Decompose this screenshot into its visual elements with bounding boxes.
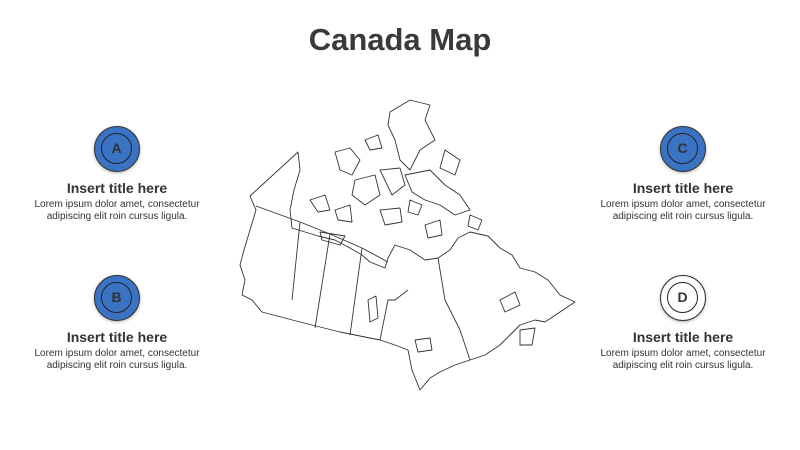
item D: Lorem ipsum dolor amet, consectetur (600, 348, 766, 359)
item D: D (677, 289, 688, 305)
item C: Insert title here (633, 180, 733, 196)
item D (600, 274, 766, 371)
item A: A (111, 140, 122, 156)
item B: Lorem ipsum dolor amet, consectetur (34, 348, 200, 359)
title: Canada Map (309, 22, 491, 57)
item A: Lorem ipsum dolor amet, consectetur (34, 199, 200, 210)
item C (600, 125, 766, 222)
item C: Lorem ipsum dolor amet, consectetur (600, 199, 766, 210)
item D: Insert title here (633, 329, 733, 345)
item D: adipiscing elit roin cursus ligula. (613, 360, 753, 371)
item C: C (677, 140, 688, 156)
item B (34, 274, 200, 371)
item A: adipiscing elit roin cursus ligula. (47, 211, 187, 222)
item A: Insert title here (67, 180, 167, 196)
item A (34, 125, 200, 222)
item B: adipiscing elit roin cursus ligula. (47, 360, 187, 371)
item B: B (111, 289, 122, 305)
item C: adipiscing elit roin cursus ligula. (613, 211, 753, 222)
item B: Insert title here (67, 329, 167, 345)
